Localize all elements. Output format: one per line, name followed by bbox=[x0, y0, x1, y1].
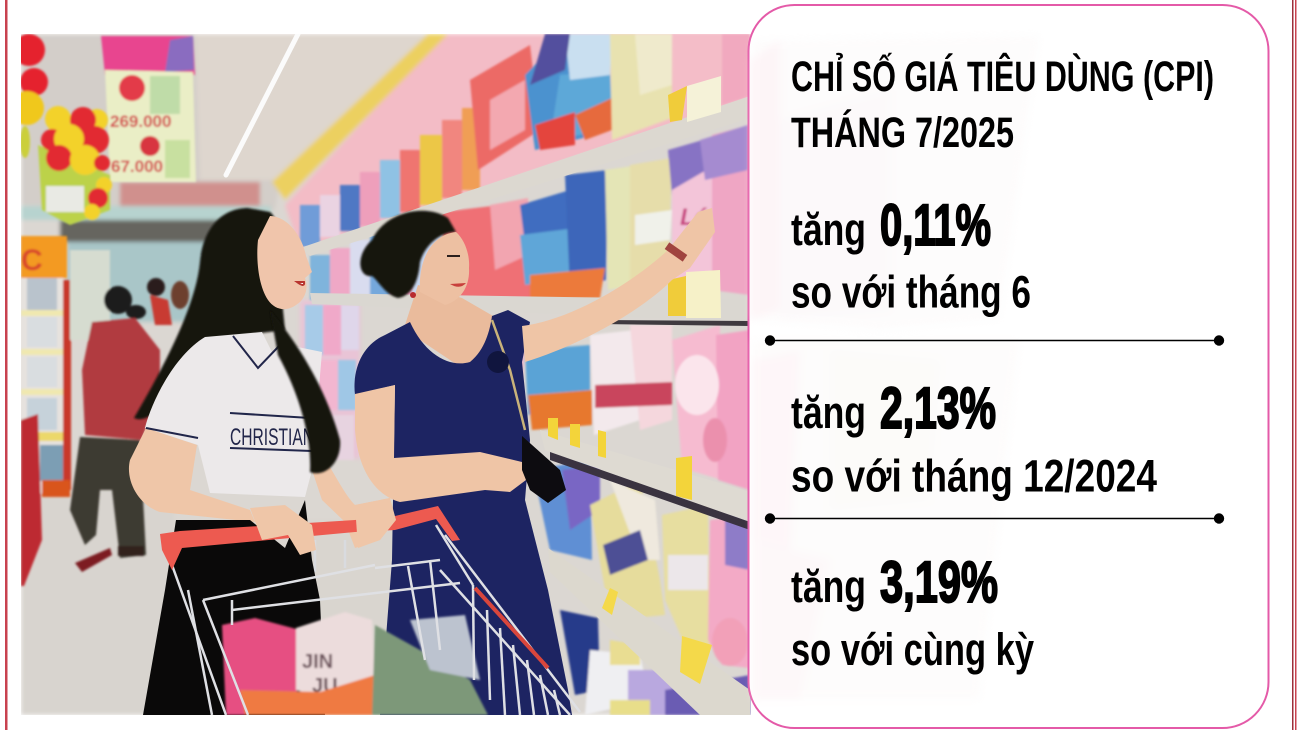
collar bbox=[233, 336, 280, 368]
stat: compared with December 2024: so với tháng 12/2024 bbox=[791, 450, 1157, 502]
eyes, mouth and earring bbox=[410, 256, 466, 298]
heading bbox=[791, 52, 1214, 157]
shopping cart basket behind the women bbox=[315, 540, 345, 572]
goods in cart bbox=[222, 612, 488, 715]
divider bbox=[765, 335, 1224, 346]
hanging promo sign: 67.000 bbox=[111, 157, 163, 176]
photo: shoppers in a supermarket aisle bbox=[10, 34, 751, 715]
face bbox=[257, 216, 312, 309]
stat: compared with December 2024: 2,13% bbox=[880, 376, 996, 441]
stat: compared with December 2024 bbox=[791, 376, 1157, 502]
store background: ceiling, wall and floor bbox=[21, 34, 751, 715]
panel background bbox=[748, 5, 1268, 728]
divider bbox=[765, 513, 1224, 524]
stat: compared with December 2024: tăng bbox=[791, 387, 866, 438]
panel: CPI statistics bbox=[748, 5, 1268, 728]
heading: THÁNG 7/2025 bbox=[791, 109, 1014, 157]
stat: compared with same period last year: 3,19% bbox=[880, 550, 998, 615]
skirt bbox=[143, 500, 325, 715]
wire basket bbox=[172, 525, 580, 715]
woman in navy dress bbox=[354, 208, 715, 715]
faded product ghost image bbox=[750, 35, 1040, 700]
hanging promo sign: 269.000 bbox=[110, 112, 171, 131]
neck and chest bbox=[405, 285, 493, 364]
stat: compared with June bbox=[791, 193, 1031, 318]
left shelving and background shopper: C bbox=[21, 244, 43, 277]
hands on handle bbox=[250, 498, 396, 555]
stat: compared with June: tăng bbox=[791, 204, 866, 255]
goods in cart: JIN bbox=[302, 651, 333, 673]
hanging promo sign bbox=[101, 36, 196, 182]
cart rim red strip bbox=[475, 588, 548, 668]
hair bbox=[360, 211, 456, 298]
stat: compared with same period last year: so với cùng kỳ bbox=[791, 624, 1034, 675]
handbag and chain bbox=[492, 320, 566, 503]
shirt print bbox=[146, 413, 314, 451]
shirt print: CHRISTIAN bbox=[230, 424, 314, 451]
left shelving and background shopper bbox=[21, 236, 189, 586]
dress bbox=[354, 310, 572, 715]
shelf products: stacked detergent pouches bbox=[300, 34, 750, 715]
lower arm bbox=[355, 385, 526, 502]
handle bbox=[160, 506, 460, 570]
shelf products: stacked detergent pouches: Lé bbox=[680, 204, 708, 231]
stat: compared with June: so với tháng 6 bbox=[791, 266, 1031, 318]
smile bbox=[297, 282, 304, 285]
raised arm bbox=[522, 208, 715, 362]
face bbox=[420, 232, 469, 305]
arms bbox=[129, 428, 255, 522]
stat: compared with same period last year: tăng bbox=[791, 561, 866, 612]
goods in cart: JU bbox=[312, 675, 338, 697]
long hair behind bbox=[134, 208, 285, 419]
shirt bbox=[145, 332, 322, 497]
corsage bbox=[487, 351, 509, 373]
shopping cart bbox=[160, 498, 580, 715]
balloons bbox=[10, 34, 112, 225]
stat: compared with June: 0,11% bbox=[880, 193, 991, 258]
hair over shoulder bbox=[270, 310, 340, 473]
shelf edges and price tags bbox=[300, 76, 750, 715]
ceiling light bbox=[226, 34, 298, 175]
stat: compared with same period last year bbox=[791, 550, 1034, 675]
woman in white shirt bbox=[129, 208, 395, 715]
